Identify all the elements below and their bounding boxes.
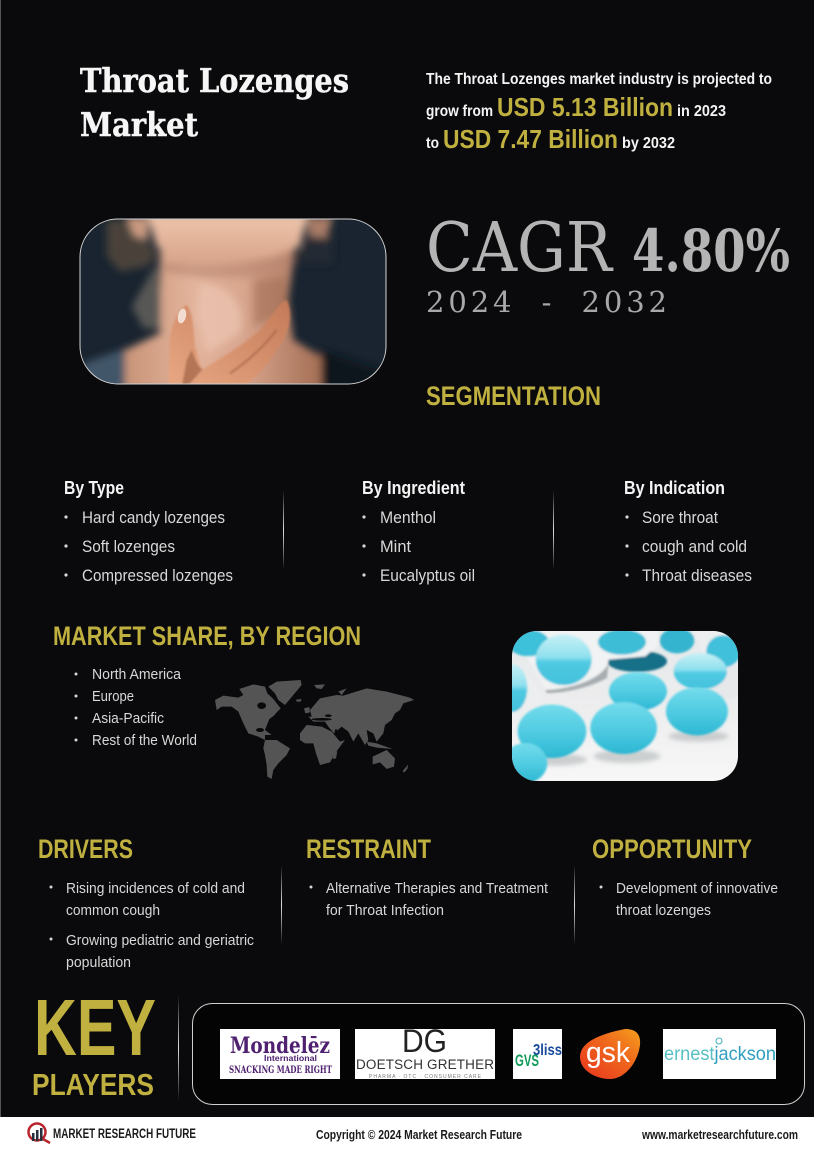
drivers list: Rising incidences of cold and [66, 880, 245, 897]
market size summary: USD 5.13 Billion [497, 92, 673, 122]
logo: Doetsch Grether: PHARMA · OTC · CONSUMER CARE [369, 1074, 482, 1080]
market size summary: The Throat Lozenges market industry is projected to [426, 71, 772, 88]
heading: market share by region: MARKET SHARE, BY REGION [53, 621, 361, 651]
segment: by ingredient: Mint [380, 538, 411, 556]
restraint list: for Throat Infection [326, 902, 444, 919]
title [80, 61, 349, 144]
segment: by type: By Type [64, 478, 124, 498]
logo: Mondelez: Mondelēz [230, 1033, 330, 1059]
drivers list: common cough [66, 902, 160, 919]
logo: GSK: gsk [586, 1037, 630, 1069]
logo: Bliss GVS: GVS [515, 1051, 539, 1070]
market size summary: USD 7.47 Billion [443, 124, 618, 154]
footer bar [0, 1117, 814, 1150]
segment: by indication: Sore throat [642, 509, 718, 527]
photo: blue lozenges [512, 631, 738, 781]
segment: by type: Hard candy lozenges [82, 509, 225, 527]
copyright: Copyright © 2024 Market Research Future [316, 1127, 522, 1142]
region list: Europe [92, 688, 134, 705]
opportunity list: throat lozenges [616, 902, 711, 919]
logo: Doetsch Grether: DG [402, 1023, 447, 1059]
region list: Asia-Pacific [92, 710, 164, 727]
segment: by type: Compressed lozenges [82, 567, 233, 585]
segment: by type: Soft lozenges [82, 538, 175, 556]
region list: North America [92, 666, 182, 683]
logo: Market Research Future: MARKET RESEARCH FUTURE [53, 1126, 196, 1141]
segment: by indication: By Indication [624, 478, 725, 498]
drivers list: population [66, 954, 131, 971]
CAGR figure: 2024 - 2032 [426, 285, 667, 319]
logo: GSK [580, 1029, 640, 1079]
segment: by type [64, 478, 233, 585]
heading: segmentation: SEGMENTATION [426, 381, 601, 411]
logo: Ernest Jackson: ernestjackson [664, 1044, 776, 1065]
segment: by ingredient: Menthol [380, 509, 436, 527]
heading: opportunity: OPPORTUNITY [592, 834, 752, 864]
logo: Bliss GVS [513, 1029, 562, 1079]
CAGR figure [426, 209, 790, 319]
restraint list [310, 880, 549, 919]
segment: by ingredient: By Ingredient [362, 478, 465, 498]
world map [215, 680, 414, 779]
region list [74, 666, 197, 749]
logo: Mondelez: International [264, 1054, 317, 1063]
market size summary: to [426, 135, 439, 152]
heading: key players: PLAYERS [32, 1067, 154, 1102]
drivers list: Growing pediatric and geriatric [66, 932, 254, 949]
logo: Ernest Jackson [663, 1029, 776, 1079]
heading: key players: KEY [34, 983, 156, 1072]
drivers list [50, 880, 254, 971]
market size summary: grow from [426, 103, 493, 120]
panel: key player logos [192, 1004, 804, 1104]
heading: drivers: DRIVERS [38, 834, 133, 864]
logo: Mondelez: SNACKING MADE RIGHT [229, 1065, 332, 1076]
title: Market [80, 105, 199, 144]
region list: Rest of the World [92, 732, 197, 749]
segment: by indication [624, 478, 752, 585]
heading: restraint: RESTRAINT [306, 834, 431, 864]
restraint list: Alternative Therapies and Treatment [326, 880, 549, 897]
heading: key players [32, 983, 156, 1102]
segment: by indication: cough and cold [642, 538, 747, 556]
logo: Doetsch Grether: DOETSCH GRETHER [356, 1057, 494, 1072]
market size summary: in 2023 [677, 103, 726, 120]
segment: by ingredient [362, 478, 475, 585]
logo: Doetsch Grether [355, 1023, 495, 1080]
opportunity list [600, 880, 778, 919]
market size summary [426, 71, 772, 154]
title: Throat Lozenges [80, 61, 349, 100]
photo: hand on throat [80, 213, 390, 390]
CAGR figure: CAGR [426, 209, 614, 288]
logo: Mondelez [220, 1029, 340, 1079]
segment: by ingredient: Eucalyptus oil [380, 567, 475, 585]
segment: by indication: Throat diseases [642, 567, 752, 585]
market size summary: by 2032 [622, 135, 675, 152]
opportunity list: Development of innovative [616, 880, 778, 897]
logo: Market Research Future [28, 1124, 196, 1143]
logo: Bliss GVS: 3liss [533, 1042, 562, 1059]
